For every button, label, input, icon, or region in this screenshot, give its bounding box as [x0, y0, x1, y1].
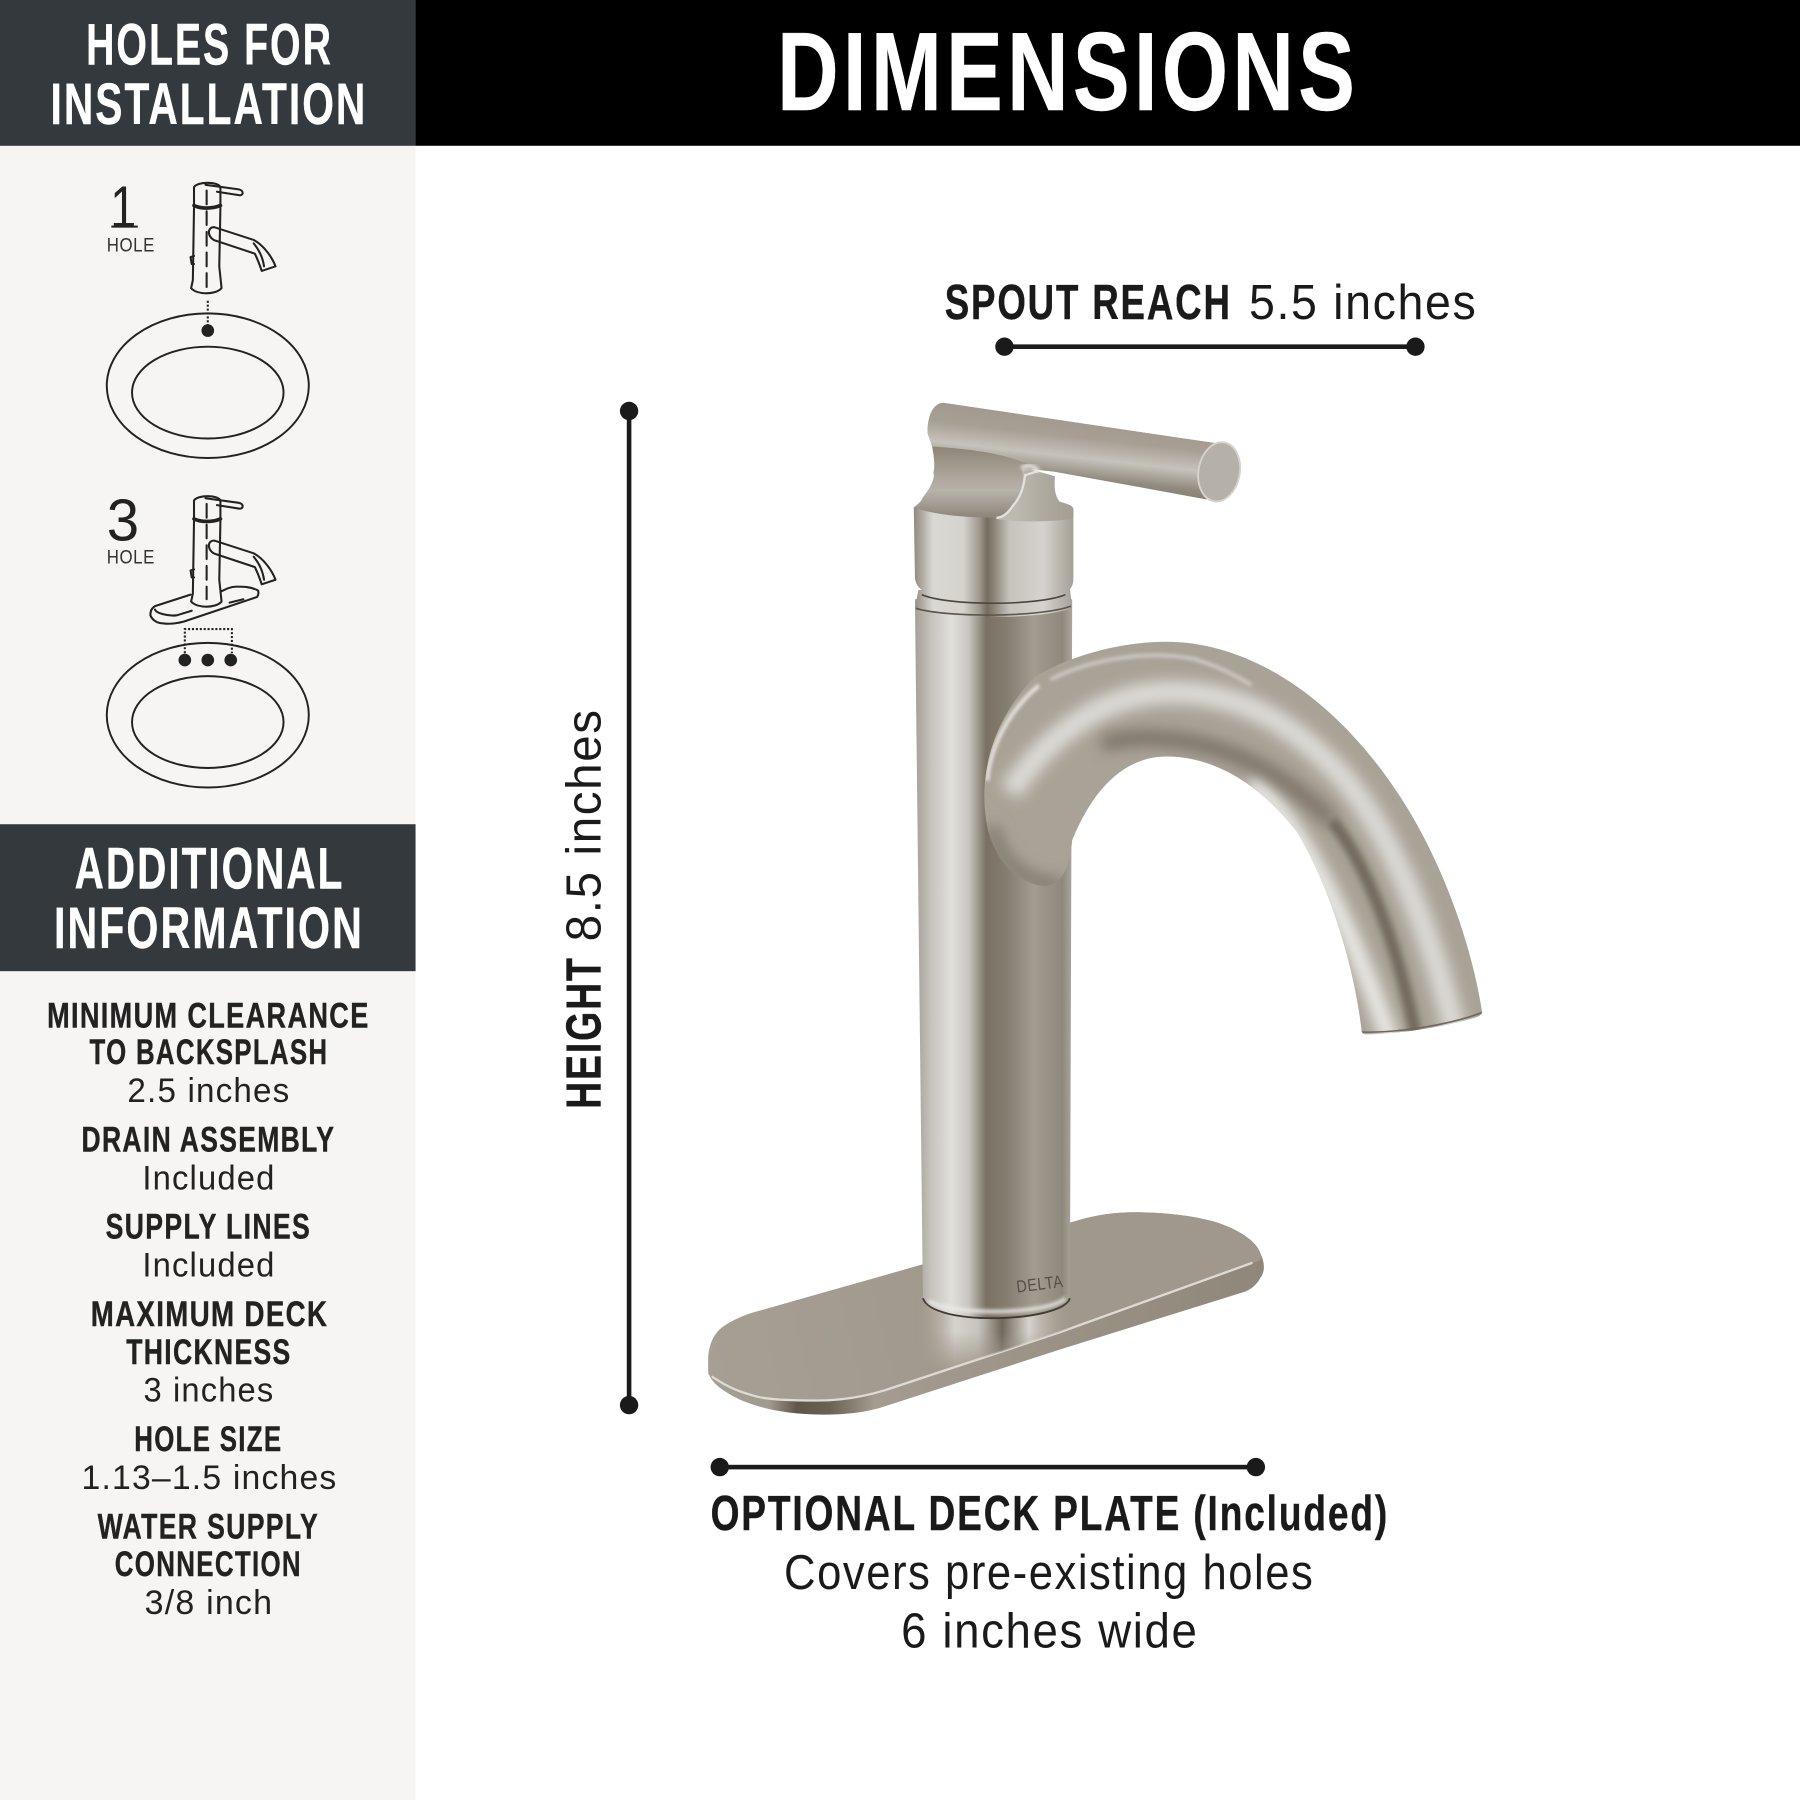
additional information list: [47, 995, 370, 1622]
additional information list: Included: [142, 1247, 276, 1285]
one hole installation diagram: 1: [110, 173, 138, 240]
additional information list: WATER SUPPLY: [98, 1506, 319, 1546]
optional deck plate dimension: 6 inches wide: [901, 1603, 1198, 1658]
left sidebar panel: [0, 0, 416, 1800]
additional information list: 3 inches: [143, 1372, 274, 1410]
height dimension: [556, 402, 638, 1414]
additional information list: MINIMUM CLEARANCE: [47, 995, 370, 1035]
height dimension: 8.5 inches: [556, 708, 611, 941]
header: dimensions title: DIMENSIONS: [777, 9, 1359, 134]
handle: [914, 403, 1245, 518]
collar: [914, 465, 1073, 602]
additional information list: 1.13–1.5 inches: [82, 1459, 338, 1497]
header: holes for installation: [0, 0, 416, 146]
one hole installation diagram: [107, 173, 309, 458]
three hole installation diagram: 3: [107, 487, 141, 554]
additional information list: 2.5 inches: [127, 1072, 290, 1110]
additional information list: Included: [142, 1159, 276, 1197]
collar ring: [915, 588, 1072, 617]
additional information list: MAXIMUM DECK: [91, 1294, 328, 1334]
optional deck plate dimension: [711, 1458, 1389, 1658]
stem: DELTA: [1015, 1271, 1064, 1297]
additional information list: DRAIN ASSEMBLY: [82, 1119, 335, 1159]
spout reach dimension: [945, 275, 1477, 356]
three hole installation diagram: [107, 487, 309, 788]
one hole installation diagram: HOLE: [107, 234, 155, 256]
three hole installation diagram: HOLE: [107, 547, 155, 569]
faucet illustration: [708, 403, 1482, 1415]
deck plate: [708, 1212, 1264, 1415]
header: additional information: INFORMATION: [54, 896, 364, 961]
spout reach dimension: SPOUT REACH: [945, 275, 1232, 330]
optional deck plate dimension: OPTIONAL DECK PLATE (Included): [711, 1486, 1389, 1541]
header: additional information: ADDITIONAL: [75, 837, 344, 902]
additional information list: HOLE SIZE: [134, 1419, 282, 1459]
spout: [984, 642, 1482, 1045]
header: holes for installation: INSTALLATION: [51, 72, 367, 137]
height dimension: HEIGHT: [556, 956, 611, 1109]
additional information list: 3/8 inch: [145, 1584, 273, 1622]
header: dimensions title: [416, 0, 1800, 146]
optional deck plate dimension: Covers pre-existing holes: [784, 1545, 1314, 1600]
stem: [915, 599, 1072, 1319]
additional information list: SUPPLY LINES: [106, 1207, 311, 1247]
header: holes for installation: HOLES FOR: [86, 12, 333, 77]
additional information list: TO BACKSPLASH: [90, 1032, 328, 1072]
header: additional information: [0, 824, 416, 971]
additional information list: THICKNESS: [126, 1332, 292, 1372]
additional information list: CONNECTION: [115, 1544, 302, 1584]
spout reach dimension: 5.5 inches: [1249, 275, 1477, 330]
